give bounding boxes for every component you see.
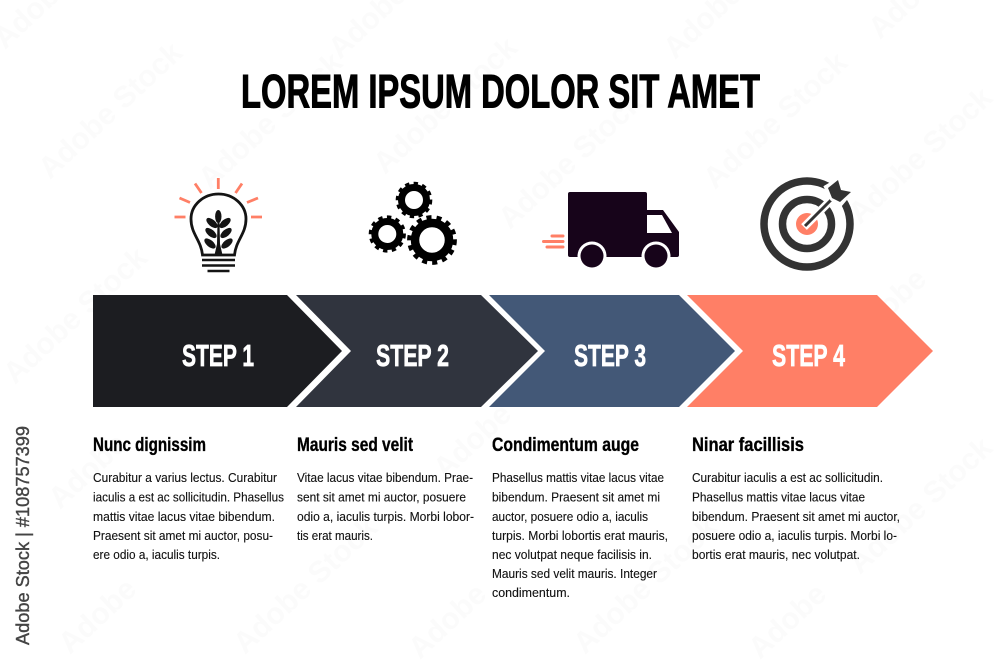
body: step 2: Vitae lacus vitae bibendum. Prae- bbox=[297, 471, 473, 485]
icon: delivery truck bbox=[544, 192, 679, 270]
body: step 1: ere odio a, iaculis turpis. bbox=[93, 548, 220, 562]
heading: step 2: Mauris sed velit bbox=[297, 435, 414, 456]
text: Adobe Stock bbox=[227, 511, 384, 660]
body: step 3: bibendum. Praesent sit amet mi bbox=[492, 490, 660, 504]
body: step 3: condimentum. bbox=[492, 586, 570, 600]
body: step 3: Phasellus mattis vitae lacus vitae bbox=[492, 471, 664, 485]
chevron: step 2: STEP 2 bbox=[376, 338, 449, 373]
body: step 4: Curabitur iaculis a est ac sollicitudin. bbox=[692, 471, 883, 485]
text: Adobe Stock bbox=[842, 81, 999, 230]
body: step 1: Curabitur a varius lectus. Curabitur bbox=[93, 471, 277, 485]
chevron: step 4: STEP 4 bbox=[772, 338, 846, 373]
body: step 1 bbox=[93, 471, 284, 562]
body: step 1: iaculis a est ac sollicitudin. Phasellus bbox=[93, 490, 284, 504]
icon: gears bbox=[370, 184, 455, 263]
text: Adobe Stock bbox=[192, 46, 349, 195]
body: step 1: Praesent sit amet mi auctor, posu- bbox=[93, 529, 273, 543]
body: step 3: auctor, posuere odio a, iaculis bbox=[492, 510, 648, 524]
text block: step 2 bbox=[297, 435, 474, 543]
body: step 3 bbox=[492, 471, 668, 600]
body: step 2: tis erat mauris. bbox=[297, 529, 373, 543]
body: step 2: odio a, iaculis turpis. Morbi lobor- bbox=[297, 510, 474, 524]
chevron: step 1: STEP 1 bbox=[182, 338, 254, 373]
chevron: step 2 bbox=[296, 295, 538, 407]
text: Adobe Stock bbox=[492, 86, 649, 235]
body: step 4: bibendum. Praesent sit amet mi auctor, bbox=[692, 510, 900, 524]
body: step 4: posuere odio a, iaculis turpis. Morbi lo- bbox=[692, 529, 897, 543]
side credit: Adobe Stock | #108757399 bbox=[12, 426, 33, 645]
body: step 3: Mauris sed velit mauris. Integer bbox=[492, 567, 657, 581]
chevron: step 3 bbox=[489, 295, 735, 407]
text: Adobe bbox=[52, 572, 143, 660]
chevron: step 3: STEP 3 bbox=[574, 338, 646, 373]
text: Adobe bbox=[842, 262, 933, 350]
text block: step 1 bbox=[93, 435, 284, 562]
body: step 4: bortis erat mauris, nec volutpat. bbox=[692, 548, 860, 562]
text: Adobe bbox=[42, 427, 133, 515]
body: step 4: Phasellus mattis vitae lacus vitae bbox=[692, 490, 865, 504]
body: step 2: sent sit amet mi auctor, posuere bbox=[297, 490, 466, 504]
text block: step 4 bbox=[692, 435, 900, 562]
text: Adobe Stock bbox=[697, 46, 854, 195]
icon: light bulb with plant bbox=[174, 178, 262, 271]
text: Adobe Stock bbox=[842, 431, 999, 580]
text block: step 3 bbox=[492, 435, 668, 600]
chevron: step 4 bbox=[687, 295, 933, 407]
icon: target with arrow bbox=[764, 180, 851, 267]
chevron: step 1 bbox=[93, 295, 342, 407]
body: step 2 bbox=[297, 471, 474, 543]
text: Adobe Stock bbox=[0, 241, 154, 390]
heading: step 3: Condimentum auge bbox=[492, 435, 639, 456]
heading: step 4: Ninar facillisis bbox=[692, 435, 804, 456]
text: Adobe Stock bbox=[32, 36, 189, 185]
heading: step 1: Nunc dignissim bbox=[93, 435, 206, 456]
text: Adobe Stock bbox=[567, 511, 724, 660]
body: step 1: mattis vitae lacus vitae bibendum. bbox=[93, 510, 275, 524]
body: step 4 bbox=[692, 471, 900, 562]
text: Adobe Stock bbox=[367, 31, 524, 180]
body: step 3: nec volutpat neque facilisis in. bbox=[492, 548, 652, 562]
text: Adobe bbox=[427, 397, 518, 485]
body: step 3: turpis. Morbi lobortis erat mauris, bbox=[492, 529, 668, 543]
title: LOREM IPSUM DOLOR SIT AMET bbox=[241, 64, 760, 118]
